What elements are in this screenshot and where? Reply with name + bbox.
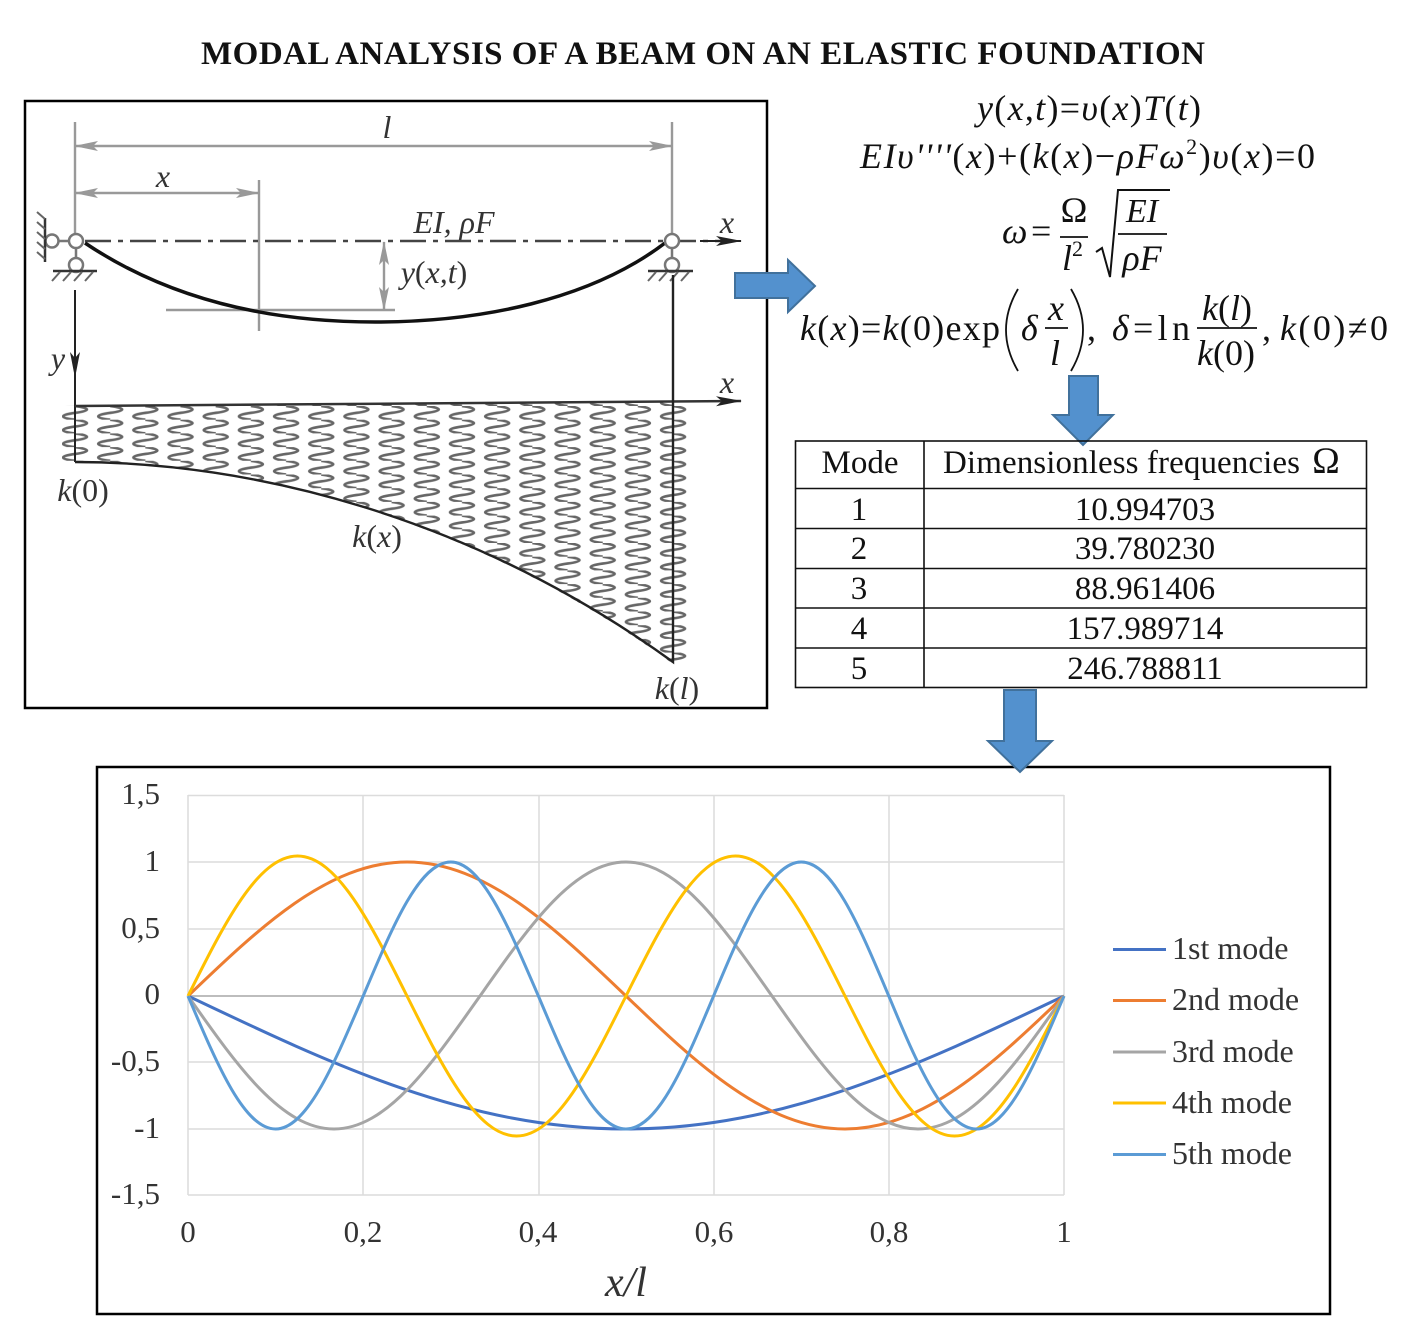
formula: stiffness law: k(x)=k(0)exp [800, 308, 1000, 348]
formula: natural frequency: EI [1125, 193, 1160, 230]
diagram labels: x [155, 158, 170, 194]
formula: stiffness law: x [1047, 288, 1064, 328]
formula: natural frequency: ω [1002, 211, 1027, 251]
diagram labels: x [719, 204, 734, 240]
y axis labels [111, 776, 160, 1211]
title: MODAL ANALYSIS OF A BEAM ON AN ELASTIC FOUNDATION [201, 36, 1205, 72]
formula: stiffness law: l [1050, 333, 1060, 373]
diagram labels: y [48, 340, 66, 376]
legend: 4th mode [1172, 1084, 1292, 1120]
x axis labels: 0 [180, 1214, 196, 1249]
diagram labels: k(x) [352, 518, 402, 554]
table: dimensionless frequencies: 2 [851, 531, 867, 567]
curve: 4th mode [188, 856, 1064, 1136]
formula: equation of motion: EIυ''''(x)+(k(x)−ρFω [860, 136, 1185, 176]
table: dimensionless frequencies [796, 441, 1366, 688]
table: dimensionless frequencies: 10.994703 [1075, 492, 1215, 528]
legend: 3rd mode [1172, 1033, 1294, 1069]
diagram labels [48, 109, 734, 706]
arrow: diagram to formulas [735, 260, 815, 312]
x axis title: x/l [604, 1260, 647, 1306]
deflected beam [85, 243, 665, 322]
curve: 5th mode [188, 862, 1064, 1129]
x axis labels [180, 1214, 1072, 1249]
legend: 5th mode [1172, 1135, 1292, 1171]
table: dimensionless frequencies: 3 [851, 571, 867, 607]
table: dimensionless frequencies: 5 [851, 651, 867, 687]
formula: stiffness law: k(0)≠0 [1280, 308, 1388, 348]
dimension lines [75, 122, 672, 331]
formula: equation of motion: υ(x)=0 [1212, 136, 1315, 176]
y axis [74, 290, 76, 462]
legend: 2nd mode [1172, 981, 1299, 1017]
formula: stiffness law: , [1262, 308, 1271, 348]
beam axis [85, 240, 722, 242]
y axis labels: 1,5 [121, 776, 160, 811]
y axis labels: 1 [144, 843, 160, 878]
formula: natural frequency: 2 [1072, 236, 1083, 261]
x axis labels: 0,2 [344, 1214, 382, 1249]
diagram labels: x [719, 364, 734, 400]
formula: equation of motion: ) [1199, 136, 1211, 176]
panel: mode shape chart [97, 767, 1330, 1314]
y axis labels: -0,5 [111, 1043, 160, 1078]
formula: natural frequency: ρF [1121, 238, 1163, 278]
formula: equation of motion: 2 [1186, 134, 1197, 159]
arrow: formulas to table [1053, 376, 1113, 445]
y axis labels: 0,5 [121, 910, 160, 945]
curve: 3rd mode [188, 862, 1064, 1129]
y axis labels: 0 [144, 976, 160, 1011]
legend: 1st mode [1172, 930, 1288, 966]
spring field [62, 402, 688, 664]
formula: stiffness law: k(l) [1202, 288, 1252, 328]
right supports [648, 234, 693, 281]
table: dimensionless frequencies: Mode [822, 445, 898, 481]
curve: 1st mode [188, 996, 1064, 1129]
formula: stiffness law [800, 288, 1388, 373]
table: dimensionless frequencies: Ω [1312, 441, 1340, 482]
table: dimensionless frequencies: 1 [851, 492, 867, 528]
diagram labels: EI, ρF [412, 204, 495, 240]
formula: natural frequency: l [1062, 238, 1072, 278]
y axis labels: -1,5 [111, 1176, 160, 1211]
x axis labels: 0,6 [695, 1214, 733, 1249]
gridlines [188, 795, 1064, 1195]
diagram labels: l [383, 109, 392, 145]
diagram labels: k(l) [655, 670, 699, 706]
x axis arrow top [700, 240, 741, 242]
formula: natural frequency [1002, 190, 1170, 278]
table: dimensionless frequencies: Dimensionless frequencies [943, 445, 1300, 481]
table: dimensionless frequencies: 157.989714 [1067, 611, 1223, 647]
panel: beam diagram [25, 101, 767, 708]
formula: stiffness law: k(0) [1197, 333, 1255, 373]
foundation stiffness curve [75, 275, 673, 662]
table: dimensionless frequencies: 246.788811 [1067, 651, 1223, 687]
x axis labels: 1 [1056, 1214, 1072, 1249]
formula: separation of variables: y(x,t)=υ(x)T(t) [974, 88, 1201, 128]
foundation axis [75, 401, 741, 406]
diagram labels: y(x,t) [398, 254, 467, 290]
diagram labels: k(0) [57, 472, 109, 508]
formula: stiffness law: , [1087, 308, 1096, 348]
y axis labels: -1 [134, 1110, 160, 1145]
formula: stiffness law: δ [1021, 308, 1039, 348]
arrow: table to chart [988, 690, 1052, 772]
x axis labels: 0,8 [870, 1214, 908, 1249]
formula: natural frequency: Ω [1061, 190, 1087, 230]
formula: stiffness law: δ=ln [1112, 308, 1190, 348]
curve: 2nd mode [188, 862, 1064, 1129]
table: dimensionless frequencies: 4 [851, 611, 867, 647]
x axis labels: 0,4 [519, 1214, 558, 1249]
table: dimensionless frequencies: 88.961406 [1075, 571, 1215, 607]
legend [1113, 930, 1299, 1171]
formula: natural frequency: = [1031, 211, 1051, 251]
left supports [37, 212, 97, 281]
table: dimensionless frequencies: 39.780230 [1075, 531, 1215, 567]
